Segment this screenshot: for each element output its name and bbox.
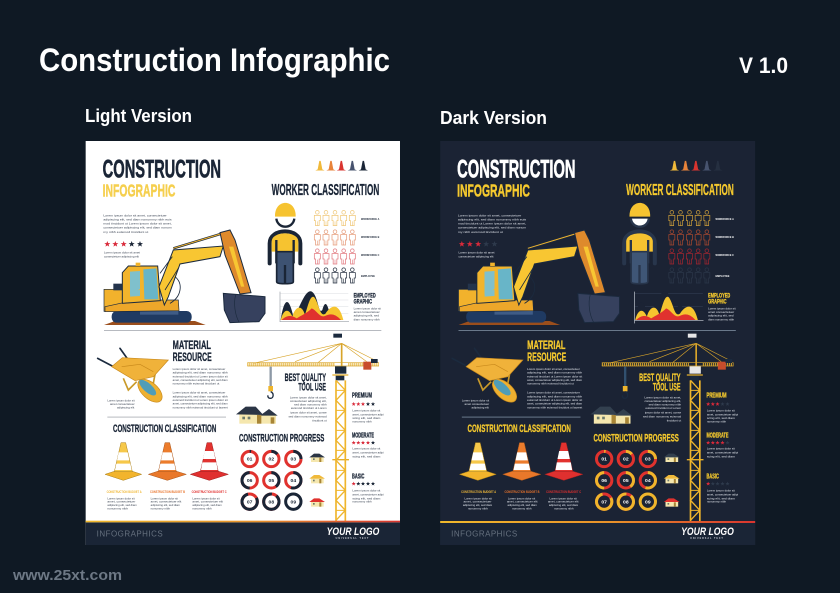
- premium tier: amet, consectetuer adipi: [707, 412, 738, 416]
- budget c: [192, 490, 227, 510]
- employed text: amet consectetuer: [354, 310, 380, 314]
- icon: small house red roof: [309, 498, 325, 507]
- progress donut 07: 07: [601, 499, 607, 505]
- premium tier: amet, consectetuer adipi: [352, 412, 384, 416]
- star rating: [459, 241, 497, 247]
- material paragraph: Lorem ipsum dolor sit amet, consectetuer: [173, 367, 225, 371]
- material paragraph: euismod tincidunt ut Lorem ipsum dolor sit: [173, 398, 228, 402]
- logo: [681, 526, 734, 540]
- employed text: amet consectetuer: [708, 310, 734, 314]
- worker row labels: WORKFORCE C: [715, 253, 734, 257]
- heading: best quality tool use: BEST QUALITY: [639, 372, 680, 384]
- icon: orange cone: [503, 443, 541, 480]
- progress donut 05: [264, 473, 279, 488]
- watermark: www.25xt.com: [12, 567, 122, 584]
- moderate tier: scing elit, sed diam: [707, 455, 735, 459]
- progress donut 08: [615, 491, 637, 512]
- progress donut 01: [596, 451, 612, 467]
- subtitle: infographic: INFOGRAPHIC: [457, 181, 530, 201]
- heading: material resource: RESOURCE: [173, 350, 212, 364]
- budget c: CONSTRUCTION BUDGET C: [192, 490, 227, 494]
- heading: dark version: Dark Version: [440, 108, 547, 128]
- icon: small house red roof: [664, 498, 679, 507]
- progress donut 04: [286, 473, 301, 488]
- moderate tier: MODERATE: [352, 433, 374, 440]
- progress donut 05: 05: [623, 478, 629, 484]
- worker row labels: EMPLOYEE: [361, 274, 375, 278]
- heading: employed graphic: GRAPHIC: [708, 298, 727, 305]
- material paragraph: euismod tincidunt ut Lorem ipsum dolor sit: [527, 398, 582, 402]
- premium tier: [352, 393, 384, 424]
- budget c: nonummy nibh: [554, 506, 574, 510]
- moderate tier: amet, consectetuer adipi: [352, 450, 384, 454]
- heading: construction classification: CONSTRUCTION CLASSIFICATION: [113, 423, 216, 435]
- area chart: [634, 291, 703, 323]
- people row 3: [314, 249, 355, 264]
- worker row labels: WORKFORCE A: [361, 217, 380, 221]
- tool paragraph: sed diam nonummy euismod: [643, 414, 681, 418]
- premium tier: scing elit, sed diam: [707, 416, 735, 420]
- employed text: [708, 306, 736, 321]
- icon: yellow cone: [459, 443, 496, 480]
- tool paragraph: consectetuer adipiscing elit,: [290, 399, 327, 403]
- footer label: INFOGRAPHICS: [97, 530, 163, 539]
- progress donut 09: 09: [645, 499, 651, 505]
- icon: small house yellow roof: [664, 475, 679, 483]
- tool paragraph: ipsum dolor sit amet, conse: [290, 410, 327, 414]
- budget a: adipiscing elit, sed diam: [463, 503, 493, 507]
- basic tier: amet, consectetuer adipi: [352, 492, 384, 496]
- budget c: adipiscing elit, sed diam: [549, 503, 579, 507]
- main title: Construction Infographic: [39, 42, 390, 78]
- premium tier: scing elit, sed diam: [352, 416, 381, 420]
- heading: worker classification: WORKER CLASSIFICATION: [272, 182, 379, 199]
- budget b: [504, 490, 540, 510]
- material paragraph: amet, consectetuer adipiscing elit, sed diam: [527, 378, 583, 382]
- budget b: CONSTRUCTION BUDGET B: [150, 490, 185, 494]
- moderate tier: amet, consectetuer adipi: [707, 450, 738, 454]
- heading: best quality tool use: TOOL USE: [653, 381, 680, 393]
- employed text: adipiscing elit, sed: [354, 313, 379, 317]
- intro paragraph: adipiscing elit, sed diam nonummy nibh euis: [103, 218, 172, 222]
- budget b: amet, consectetuer elit: [151, 500, 182, 504]
- tool paragraph: Lorem ipsum dolor sit amet,: [290, 396, 327, 400]
- budget a: Lorem ipsum dolor sit: [464, 497, 492, 501]
- progress donut 04: [640, 473, 655, 488]
- moderate tier: [706, 433, 738, 459]
- material paragraph: [173, 367, 228, 409]
- material paragraph: nonummy nibh euismod tincidunt ut laoreet: [173, 405, 228, 409]
- icon: tower crane: [247, 334, 379, 522]
- people row 1: [669, 210, 710, 226]
- logo: [327, 526, 380, 540]
- icon: worker: [624, 203, 655, 284]
- progress donut 07: [594, 491, 615, 512]
- subtitle: infographic: INFOGRAPHIC: [103, 181, 175, 201]
- budget a: [461, 490, 497, 510]
- progress donut 02: 02: [269, 457, 274, 463]
- budget a: adipiscing elit, sed diam: [107, 503, 137, 507]
- tool paragraph: euismod tincidunt ut Lorem: [645, 406, 682, 410]
- budget c: Lorem ipsum dolor sit: [549, 497, 577, 501]
- progress donut 01: 01: [247, 457, 253, 463]
- icon: red cone: [545, 443, 583, 480]
- title: construction: CONSTRUCTION: [103, 156, 221, 184]
- logo: UNIVERSAL TEXT: [690, 537, 723, 540]
- wheelbarrow caption: amet consectetuer: [110, 402, 135, 406]
- material paragraph: nonummy nibh euismod tincidunt ut: [173, 382, 219, 386]
- budget b: CONSTRUCTION BUDGET B: [504, 490, 540, 494]
- logo: UNIVERSAL TEXT: [336, 537, 369, 540]
- progress donut 03: [286, 451, 301, 467]
- tool paragraph: Lorem ipsum dolor sit amet,: [644, 396, 681, 400]
- intro paragraph: Lorem ipsum dolor sit amet, consectetuer: [103, 213, 167, 217]
- budget b: nonummy nibh: [151, 506, 170, 510]
- progress donut 03: 03: [291, 457, 296, 463]
- heading: employed graphic: [354, 292, 376, 305]
- wheelbarrow caption: [107, 398, 135, 410]
- icon: small house dark roof: [664, 454, 679, 462]
- worker row labels: [715, 217, 734, 278]
- icon: tower crane: [602, 334, 733, 522]
- progress donut 02: 02: [623, 457, 629, 463]
- progress donut 07: 07: [247, 499, 253, 505]
- premium tier: PREMIUM: [352, 393, 372, 400]
- basic tier: [706, 473, 738, 504]
- basic tier: Lorem ipsum dolor sit: [352, 489, 380, 493]
- progress donut 08: 08: [269, 499, 274, 505]
- intro paragraph: mod tincidunt ut Lorem ipsum dolor sit amet,: [458, 222, 526, 226]
- budget b: adipiscing elit, sed diam: [507, 503, 537, 507]
- heading: employed graphic: GRAPHIC: [354, 298, 372, 305]
- employed text: adipiscing elit, sed: [708, 313, 734, 317]
- budget a: CONSTRUCTION BUDGET A: [461, 490, 497, 494]
- premium tier: PREMIUM: [706, 393, 727, 400]
- moderate tier: MODERATE: [706, 433, 729, 440]
- progress donut 03: 03: [645, 457, 651, 463]
- employed text: diam nonummy nibh: [354, 317, 380, 321]
- panel: light version: [86, 141, 400, 545]
- star caption: Lorem ipsum dolor sit amet: [104, 251, 140, 255]
- progress donut 04: 04: [291, 478, 296, 484]
- budget b: adipiscing elit, sed diam: [151, 503, 180, 507]
- progress donut 06: 06: [247, 478, 253, 484]
- people row 4: [669, 268, 710, 283]
- worker row labels: WORKFORCE B: [361, 235, 380, 239]
- intro paragraph: my nibh euismod tincidunt ut: [458, 230, 503, 234]
- moderate tier: scing elit, sed diam: [352, 455, 381, 459]
- tool paragraph: ipsum dolor sit amet, conse: [645, 410, 682, 414]
- premium tier: nonummy nibh: [707, 420, 726, 424]
- footer band: [86, 521, 400, 545]
- people row 4: [314, 268, 355, 283]
- heading: best quality tool use: [285, 372, 326, 393]
- progress donut 08: [261, 491, 282, 512]
- progress donut 06: 06: [601, 478, 607, 484]
- material paragraph: adipiscing elit, sed diam nonummy nibh: [527, 371, 583, 375]
- icon: house: [590, 407, 632, 424]
- heading: best quality tool use: TOOL USE: [298, 381, 326, 393]
- icon: yellow cone: [105, 443, 142, 480]
- star caption: [458, 251, 495, 259]
- heading: material resource: MATERIAL: [527, 338, 565, 352]
- basic tier: nonummy nibh: [707, 500, 726, 504]
- budget a: nonummy nibh: [107, 506, 128, 510]
- basic tier: scing elit, sed diam: [352, 496, 381, 500]
- logo: YOUR LOGO: [681, 526, 734, 538]
- heading: best quality tool use: BEST QUALITY: [285, 372, 326, 384]
- employed text: Lorem ipsum dolor sit: [708, 306, 736, 310]
- budget c: [546, 490, 582, 510]
- budget c: adipiscing elit, sed diam: [192, 503, 222, 507]
- intro paragraph: my nibh euismod tincidunt ut: [103, 230, 149, 234]
- wheelbarrow caption: [462, 398, 489, 410]
- intro paragraph: adipiscing elit, sed diam nonummy nibh euis: [458, 218, 527, 222]
- progress donut 05: 05: [269, 478, 274, 484]
- material paragraph: adipiscing elit, sed diam nonummy nibh: [527, 394, 583, 398]
- budget b: [150, 490, 185, 510]
- progress donut 01: 01: [601, 457, 607, 463]
- material paragraph: nonummy nibh euismod tincidunt ut: [527, 382, 574, 386]
- progress donut 06: [242, 473, 257, 488]
- material paragraph: Lorem ipsum dolor sit amet, consectetuer: [527, 367, 580, 371]
- title: construction: CONSTRUCTION: [457, 156, 575, 184]
- progress donut 04: 04: [645, 478, 651, 484]
- material paragraph: euismod tincidunt ut Lorem ipsum dolor sit: [527, 374, 582, 378]
- premium tier: Lorem ipsum dolor sit: [707, 409, 735, 413]
- icon: excavator: [104, 230, 265, 325]
- tool paragraph: consectetuer adipiscing elit,: [644, 399, 681, 403]
- basic tier: nonummy nibh: [352, 500, 372, 504]
- heading: construction progress: CONSTRUCTION PROGRESS: [593, 433, 679, 445]
- version label: V 1.0: [739, 53, 788, 78]
- star caption: consectetuer adipiscing elit: [104, 255, 139, 259]
- people row 3: [669, 249, 710, 264]
- intro paragraph: mod tincidunt ut Lorem ipsum dolor sit amet,: [103, 222, 172, 226]
- budget a: Lorem ipsum dolor sit: [107, 497, 135, 501]
- material paragraph: nonummy nibh euismod tincidunt ut laoreet: [527, 405, 582, 409]
- icon: house: [236, 407, 278, 424]
- worker row labels: EMPLOYEE: [715, 274, 729, 278]
- progress donut 09: 09: [291, 499, 296, 505]
- premium tier: [706, 393, 738, 424]
- people row 2: [669, 230, 710, 245]
- budget a: amet, consectetuer: [463, 500, 491, 504]
- material paragraph: adipiscing elit, sed diam nonummy nibh: [173, 371, 228, 375]
- icon: wheelbarrow: [452, 348, 523, 406]
- budget c: CONSTRUCTION BUDGET C: [546, 490, 582, 494]
- budget c: amet, consectetuer elit: [192, 500, 223, 504]
- budget b: Lorem ipsum dolor sit: [508, 497, 535, 501]
- material paragraph: [527, 367, 583, 409]
- heading: best quality tool use: [639, 372, 680, 393]
- icon row: small cones: [315, 161, 368, 170]
- material paragraph: euismod tincidunt ut Lorem ipsum dolor sit: [173, 374, 228, 378]
- panel: dark version: [440, 141, 755, 545]
- worker row labels: WORKFORCE A: [715, 217, 734, 221]
- heading: employed graphic: [708, 292, 730, 305]
- heading: employed graphic: EMPLOYED: [354, 292, 376, 299]
- area chart: [280, 291, 349, 322]
- heading: material resource: [173, 338, 212, 364]
- tool paragraph: sed diam nonummy nibh: [294, 403, 327, 407]
- tool paragraph: tincidunt ut: [667, 418, 681, 422]
- intro paragraph: [103, 213, 172, 234]
- star caption: consectetuer adipiscing elit: [458, 255, 494, 259]
- heading: construction progress: CONSTRUCTION PROGRESS: [239, 433, 324, 445]
- icon: orange cone: [148, 443, 186, 480]
- progress donut 01: [242, 451, 257, 467]
- intro paragraph: consectetuer adipiscing elit, sed diam nonum: [103, 226, 172, 230]
- wheelbarrow caption: Lorem ipsum dolor sit: [462, 398, 489, 402]
- heading: light version: Light Version: [85, 106, 192, 126]
- intro paragraph: [458, 213, 527, 234]
- wheelbarrow caption: Lorem ipsum dolor sit: [107, 398, 135, 402]
- progress donut 05: [618, 473, 633, 488]
- tool paragraph: sed diam nonummy nibh: [649, 403, 682, 407]
- wheelbarrow caption: adipiscing elit: [117, 406, 134, 410]
- progress donut 07: [239, 491, 260, 512]
- moderate tier: [352, 433, 384, 459]
- tool paragraph: euismod tincidunt ut Lorem: [291, 406, 327, 410]
- wheelbarrow caption: amet consectetuer: [464, 402, 489, 406]
- tool paragraph: sed diam nonummy euismod: [289, 414, 327, 418]
- icon: wheelbarrow: [98, 348, 168, 406]
- progress donut 03: [640, 451, 655, 467]
- basic tier: scing elit, sed diam: [707, 496, 735, 500]
- budget a: CONSTRUCTION BUDGET A: [107, 490, 142, 494]
- premium tier: Lorem ipsum dolor sit: [352, 409, 380, 413]
- icon: excavator: [458, 230, 619, 325]
- material paragraph: Lorem ipsum dolor sit amet, consectetuer: [527, 391, 580, 395]
- intro paragraph: consectetuer adipiscing elit, sed diam nonum: [458, 226, 527, 230]
- logo: YOUR LOGO: [327, 526, 380, 538]
- heading: employed graphic: EMPLOYED: [708, 292, 730, 299]
- tool paragraph: [643, 396, 682, 422]
- material paragraph: amet, consectetuer adipiscing elit, sed diam: [173, 378, 228, 382]
- basic tier: Lorem ipsum dolor sit: [707, 489, 735, 493]
- star caption: Lorem ipsum dolor sit amet: [458, 251, 495, 255]
- material paragraph: Lorem ipsum dolor sit amet, consectetuer: [173, 391, 225, 395]
- worker row labels: [361, 217, 380, 278]
- budget a: amet, consectetuer: [107, 500, 135, 504]
- heading: material resource: RESOURCE: [527, 350, 566, 364]
- worker row labels: WORKFORCE B: [715, 235, 734, 239]
- star rating: [104, 241, 143, 247]
- employed text: Lorem ipsum dolor sit: [354, 306, 381, 310]
- basic tier: BASIC: [352, 473, 364, 480]
- progress donut 08: 08: [623, 499, 629, 505]
- budget b: nonummy nibh: [512, 506, 532, 510]
- budget c: Lorem ipsum dolor sit: [192, 497, 220, 501]
- intro paragraph: Lorem ipsum dolor sit amet, consectetuer: [458, 213, 521, 217]
- budget b: Lorem ipsum dolor sit: [151, 497, 178, 501]
- icon row: small cones: [670, 161, 722, 170]
- budget c: amet, consectetuer elit: [548, 500, 579, 504]
- tool paragraph: [289, 396, 327, 422]
- footer band: [440, 521, 755, 545]
- moderate tier: Lorem ipsum dolor sit: [707, 447, 735, 451]
- progress donut 09: [286, 494, 301, 509]
- icon: worker: [270, 203, 300, 284]
- heading: material resource: MATERIAL: [173, 338, 211, 352]
- material paragraph: amet, consectetuer adipiscing elit, sed diam: [527, 402, 583, 406]
- heading: construction classification: CONSTRUCTION CLASSIFICATION: [467, 423, 571, 435]
- employed text: [354, 306, 381, 321]
- progress donut 06: [596, 473, 612, 488]
- material paragraph: adipiscing elit, sed diam nonummy nibh: [173, 394, 228, 398]
- employed text: diam nonummy nibh: [708, 317, 734, 321]
- basic tier: [352, 473, 384, 504]
- progress donut 09: [640, 494, 655, 509]
- basic tier: amet, consectetuer adipi: [707, 492, 738, 496]
- heading: material resource: [527, 338, 566, 364]
- budget b: amet, consectetuer elit: [507, 500, 538, 504]
- moderate tier: Lorem ipsum dolor sit: [352, 447, 380, 451]
- budget a: nonummy nibh: [468, 506, 488, 510]
- material paragraph: amet, consectetuer adipiscing elit, sed diam: [173, 402, 228, 406]
- progress donut 02: [618, 451, 633, 467]
- icon: small house dark roof: [309, 454, 325, 462]
- heading: worker classification: WORKER CLASSIFICATION: [626, 182, 734, 199]
- icon: small house yellow roof: [309, 475, 325, 483]
- progress donut 02: [264, 451, 279, 467]
- wheelbarrow caption: adipiscing elit: [471, 406, 489, 410]
- star caption: [104, 251, 140, 259]
- premium tier: nonummy nibh: [352, 420, 372, 424]
- icon: red cone: [190, 443, 228, 480]
- people row 2: [314, 230, 355, 245]
- worker row labels: WORKFORCE C: [361, 253, 380, 257]
- people row 1: [314, 210, 355, 226]
- tool paragraph: tincidunt ut: [312, 418, 327, 422]
- footer label: INFOGRAPHICS: [451, 530, 517, 539]
- basic tier: BASIC: [706, 473, 719, 480]
- budget a: [107, 490, 142, 510]
- budget c: nonummy nibh: [192, 506, 212, 510]
